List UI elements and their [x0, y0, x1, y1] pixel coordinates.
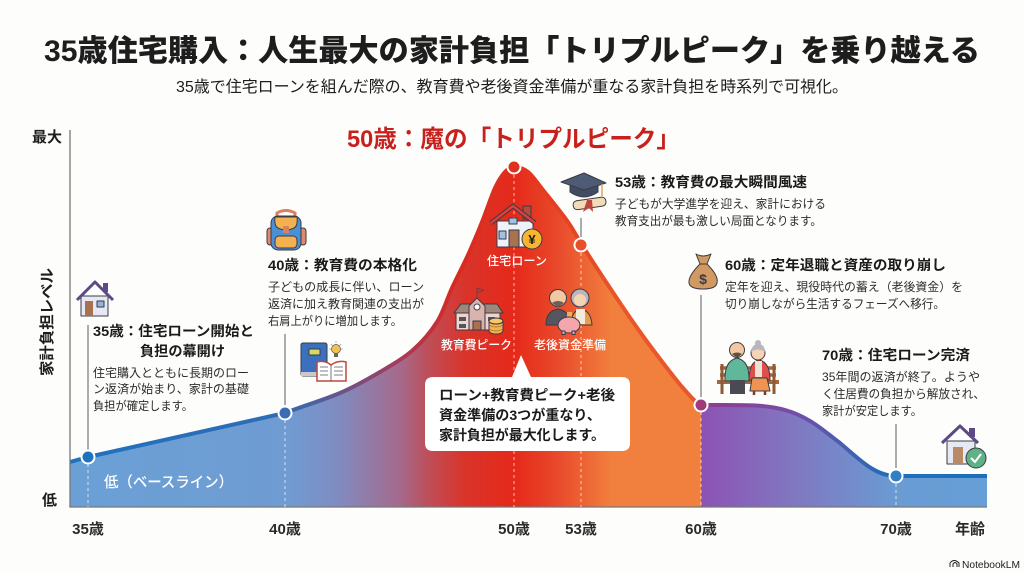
text block: age 35: 住宅購入とともに長期のロー [93, 366, 249, 380]
title: 35歳住宅購入：人生最大の家計負担「トリプルピーク」を乗り越える [44, 35, 980, 68]
icon: book and bulb [301, 341, 346, 381]
text block: age 53: 子どもが大学進学を迎え、家計における [615, 196, 826, 211]
text block: age 60: 60歳：定年退職と資産の取り崩し [725, 257, 946, 273]
y axis bottom label: 低 [42, 492, 57, 509]
marker: age 40 [278, 406, 292, 420]
marker: age 60 [694, 398, 708, 412]
marker: age 70 [890, 470, 902, 482]
text block: age 53: 53歳：教育費の最大瞬間風速 [615, 174, 807, 190]
icon: house [77, 282, 113, 316]
icon: school with coins [454, 288, 503, 334]
leader lines [88, 218, 896, 468]
text block: age 70: く住居費の負担から解放され、 [822, 386, 985, 401]
text block: age 53 [615, 174, 826, 228]
icon: elderly couple on bench [717, 340, 779, 395]
area under the curve [70, 167, 987, 507]
peak heading: 50歳：魔の「トリプルピーク」 [347, 126, 680, 153]
x axis age labels: 60歳 [685, 521, 717, 538]
callout: 家計負担が最大化します。 [439, 427, 605, 443]
text block: age 60 [725, 257, 963, 311]
icon: house with check badge [942, 426, 986, 468]
peak factor label: housing loan: 住宅ローン [487, 253, 547, 268]
curve outline [70, 167, 987, 476]
icon: money bag: $ [699, 271, 707, 287]
icon: money bag [689, 254, 717, 289]
icon: graduation cap and diploma [561, 173, 607, 212]
text block: age 40: 子どもの成長に伴い、ローン [268, 280, 424, 294]
callout [425, 355, 630, 451]
baseline label: 低（ベースライン） [104, 474, 233, 491]
text block: age 40 [268, 257, 424, 328]
text block: age 70: 家計が安定します。 [822, 403, 922, 418]
text block: age 35 [93, 323, 254, 413]
text block: age 40: 返済に加え教育関連の支出が [268, 296, 424, 311]
peak factor label: retirement funds: 老後資金準備 [534, 337, 606, 352]
x axis age labels: 40歳 [269, 521, 301, 538]
chart: household burden curve [70, 130, 987, 507]
icon: elderly couple with piggy bank [546, 289, 592, 334]
axes [70, 130, 987, 507]
x axis age labels: 50歳 [498, 521, 530, 538]
text block: age 35: 負担の幕開け [140, 343, 225, 359]
marker: age 35 [82, 450, 94, 464]
peak factor label: education peak: 教育費ピーク [441, 337, 512, 352]
text block: age 60: 定年を迎え、現役時代の蓄え（老後資金）を [725, 279, 963, 294]
callout: ローン+教育費ピーク+老後 [439, 387, 615, 403]
marker: age 50 [508, 160, 520, 174]
y axis title: 家計負担レベル [38, 268, 56, 376]
text block: age 40: 右肩上がりに増加します。 [268, 313, 402, 328]
x axis age labels: 53歳 [565, 521, 597, 538]
marker: age 53 [574, 238, 588, 252]
text block: age 53: 教育支出が最も激しい局面となります。 [615, 213, 822, 228]
text block: age 35: ン返済が始まり、家計の基礎 [93, 381, 249, 396]
text block: age 70 [822, 347, 985, 418]
text block: age 60: 切り崩しながら生活するフェーズへ移行。 [725, 296, 945, 311]
text block: age 70: 35年間の返済が終了。ようや [822, 369, 980, 384]
icon: house with yen coin [491, 206, 542, 249]
text block: age 35: 負担が確定します。 [93, 398, 193, 413]
x axis age labels: 年齢 [955, 520, 985, 538]
x axis age labels: 70歳 [880, 521, 912, 538]
x axis age labels: 35歳 [72, 521, 104, 538]
text block: age 40: 40歳：教育費の本格化 [268, 257, 417, 273]
icon: backpack [267, 210, 306, 250]
dashed age guides [88, 175, 896, 507]
text block: age 70: 70歳：住宅ローン完済 [822, 347, 970, 363]
y axis top label: 最大 [32, 128, 62, 146]
branding: NotebookLM: NotebookLM [962, 560, 1020, 571]
subtitle: 35歳で住宅ローンを組んだ際の、教育費や老後資金準備が重なる家計負担を時系列で可視化。 [176, 78, 848, 96]
icon: house with yen coin: ¥ [528, 232, 536, 247]
callout: 資金準備の3つが重なり、 [439, 407, 601, 423]
text block: age 35: 35歳：住宅ローン開始と [93, 323, 254, 339]
x axis age labels [72, 520, 985, 538]
